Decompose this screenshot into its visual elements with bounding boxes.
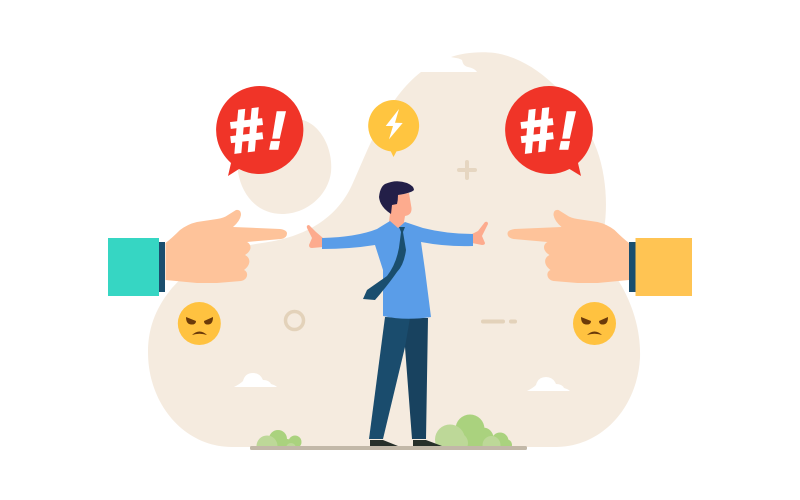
small background blob	[238, 119, 331, 214]
dash decoration	[481, 320, 517, 324]
cuff: yellow sleeve	[636, 238, 692, 296]
pointing hand	[166, 210, 287, 283]
bubble shape	[505, 86, 593, 176]
illustration: man between two accusing hands	[108, 52, 692, 450]
neck and face	[389, 193, 412, 228]
cuff: teal sleeve	[108, 238, 159, 296]
shoe: right	[413, 440, 442, 446]
bubble shape	[216, 86, 303, 176]
symbol text: #	[226, 95, 267, 166]
ground line	[250, 446, 527, 450]
speech bubble: lightning	[368, 100, 419, 157]
cuff band	[629, 242, 636, 292]
left hand	[108, 210, 287, 296]
shirt	[322, 221, 473, 319]
cloud: lower left	[234, 373, 277, 387]
face	[573, 302, 616, 345]
exclamation text: !	[268, 101, 286, 161]
exclamation text: !	[558, 101, 576, 161]
right hand	[508, 210, 692, 296]
ring decoration	[286, 312, 304, 330]
left palm	[307, 225, 323, 248]
speech bubble: left curse	[216, 86, 303, 176]
emoji: angry right	[573, 302, 616, 345]
trouser leg: back	[395, 317, 428, 439]
hair	[379, 181, 414, 214]
bush: left	[256, 430, 302, 446]
eyes	[186, 317, 213, 325]
background blob	[148, 52, 640, 447]
lightning bolt icon	[386, 109, 403, 139]
bush: right	[435, 414, 512, 446]
plus decoration	[459, 162, 475, 178]
speech bubble: right curse	[505, 86, 593, 176]
face	[178, 302, 221, 345]
emoji: angry left	[178, 302, 221, 345]
symbol text: #	[516, 95, 558, 166]
cuff band	[159, 242, 165, 292]
tie	[363, 227, 406, 300]
pointing hand	[508, 210, 629, 283]
shoe: left	[370, 440, 398, 446]
mouth	[192, 332, 207, 335]
trouser leg: front	[369, 317, 410, 439]
person	[307, 181, 488, 446]
mouth	[587, 332, 602, 335]
bubble shape	[368, 100, 419, 157]
right palm	[472, 222, 488, 245]
eyes	[581, 317, 608, 325]
cloud: lower right	[527, 377, 570, 391]
